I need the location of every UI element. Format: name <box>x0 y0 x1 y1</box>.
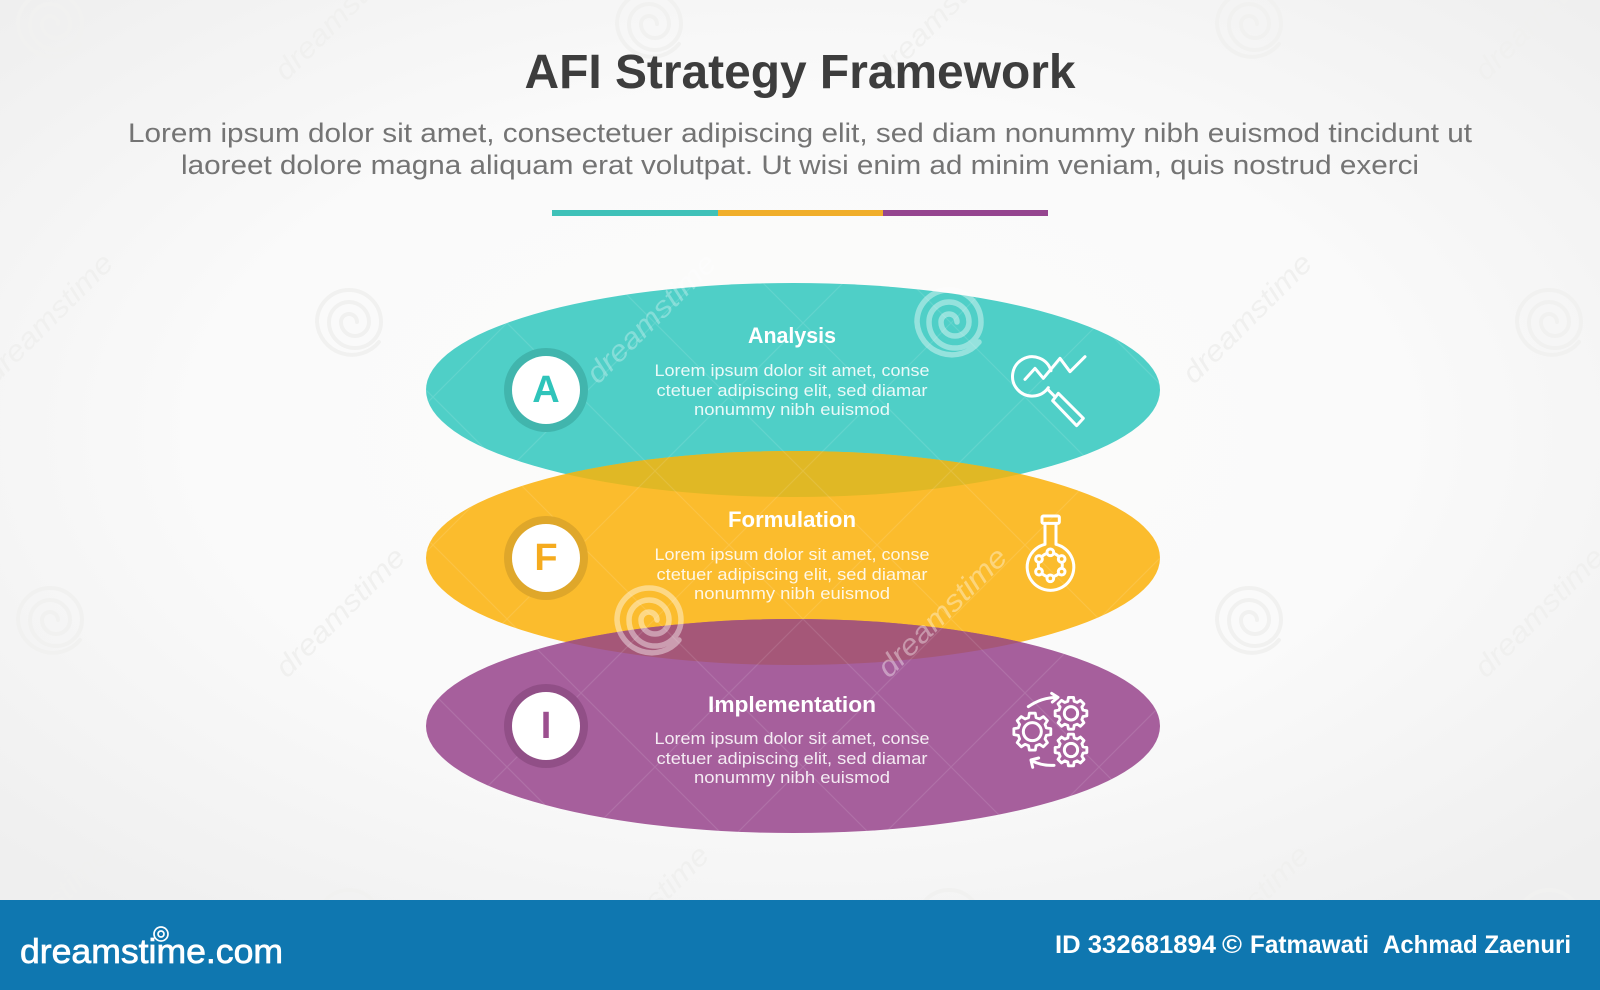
watermark text on background: dreamstime <box>573 839 716 982</box>
icon: magnifier over chart <box>1013 357 1085 426</box>
badge A: A <box>532 369 560 411</box>
body text: formulation <box>654 545 930 603</box>
watermark over ellipses: dreamstime <box>580 247 723 390</box>
ellipse: analysis <box>426 283 1160 497</box>
subtitle <box>128 118 1473 180</box>
body text: implementation: ctetuer adipiscing elit, sed diamar <box>656 749 928 768</box>
icon: gears with cycle arrows <box>1014 693 1087 767</box>
panel: analysis <box>504 323 1085 432</box>
ellipse: implementation <box>426 619 1160 833</box>
heading: implementation: Implementation <box>708 692 876 717</box>
title: AFI Strategy Framework <box>524 46 1076 99</box>
footer credit <box>1055 931 1571 959</box>
heading: formulation: Formulation <box>728 507 856 532</box>
badge A <box>504 348 588 432</box>
panel: formulation <box>504 507 1074 603</box>
footer logo: dreamstime.com: dreamstime.com <box>20 933 283 971</box>
body text: implementation: Lorem ipsum dolor sit amet, conse <box>654 729 930 748</box>
watermark text on background: dreamstime <box>1468 541 1600 684</box>
body text: formulation: Lorem ipsum dolor sit amet, conse <box>654 545 930 564</box>
panel: implementation <box>504 684 1087 787</box>
badge F: F <box>534 537 558 579</box>
body text: formulation: ctetuer adipiscing elit, sed diamar <box>656 565 928 584</box>
tricolor divider <box>552 210 1048 216</box>
badge I: I <box>541 705 551 747</box>
watermark over ellipses: dreamstime <box>871 541 1014 684</box>
footer credit: Achmad Zaenuri <box>1383 931 1571 959</box>
watermark text on background: dreamstime <box>269 541 412 684</box>
footer credit: ID 332681894 <box>1055 931 1216 959</box>
badge I <box>504 684 588 768</box>
body text: analysis: Lorem ipsum dolor sit amet, conse <box>654 361 930 380</box>
watermark over ellipses <box>580 247 1014 684</box>
body text: formulation: nonummy nibh euismod <box>694 584 890 603</box>
overlap: analysis and formulation <box>566 451 1020 497</box>
footer credit: Fatmawati <box>1250 931 1369 959</box>
body text: implementation: nonummy nibh euismod <box>694 768 890 787</box>
ellipse stack <box>426 283 1160 833</box>
subtitle: laoreet dolore magna aliquam erat volutpat. Ut wisi enim ad minim veniam, quis nostrud exerci <box>181 150 1419 180</box>
watermark text on background: dreamstime <box>1176 247 1319 390</box>
subtitle: Lorem ipsum dolor sit amet, consectetuer adipiscing elit, sed diam nonummy nibh euismod tincidunt ut <box>128 118 1473 148</box>
heading: analysis: Analysis <box>748 323 836 348</box>
logo spiral <box>154 927 168 941</box>
body text: analysis <box>654 361 930 419</box>
body text: analysis: nonummy nibh euismod <box>694 400 890 419</box>
ellipse: formulation <box>426 451 1160 665</box>
badge F <box>504 516 588 600</box>
footer band <box>0 900 1600 990</box>
icon: flask with molecule <box>1027 516 1074 590</box>
footer credit: © <box>1222 931 1243 959</box>
body text: implementation <box>654 729 930 787</box>
watermark text on background: dreamstime <box>1173 839 1316 982</box>
body text: analysis: ctetuer adipiscing elit, sed diamar <box>656 381 928 400</box>
overlap: formulation and implementation <box>566 619 1020 665</box>
watermark lattice over ellipses <box>426 284 1160 832</box>
